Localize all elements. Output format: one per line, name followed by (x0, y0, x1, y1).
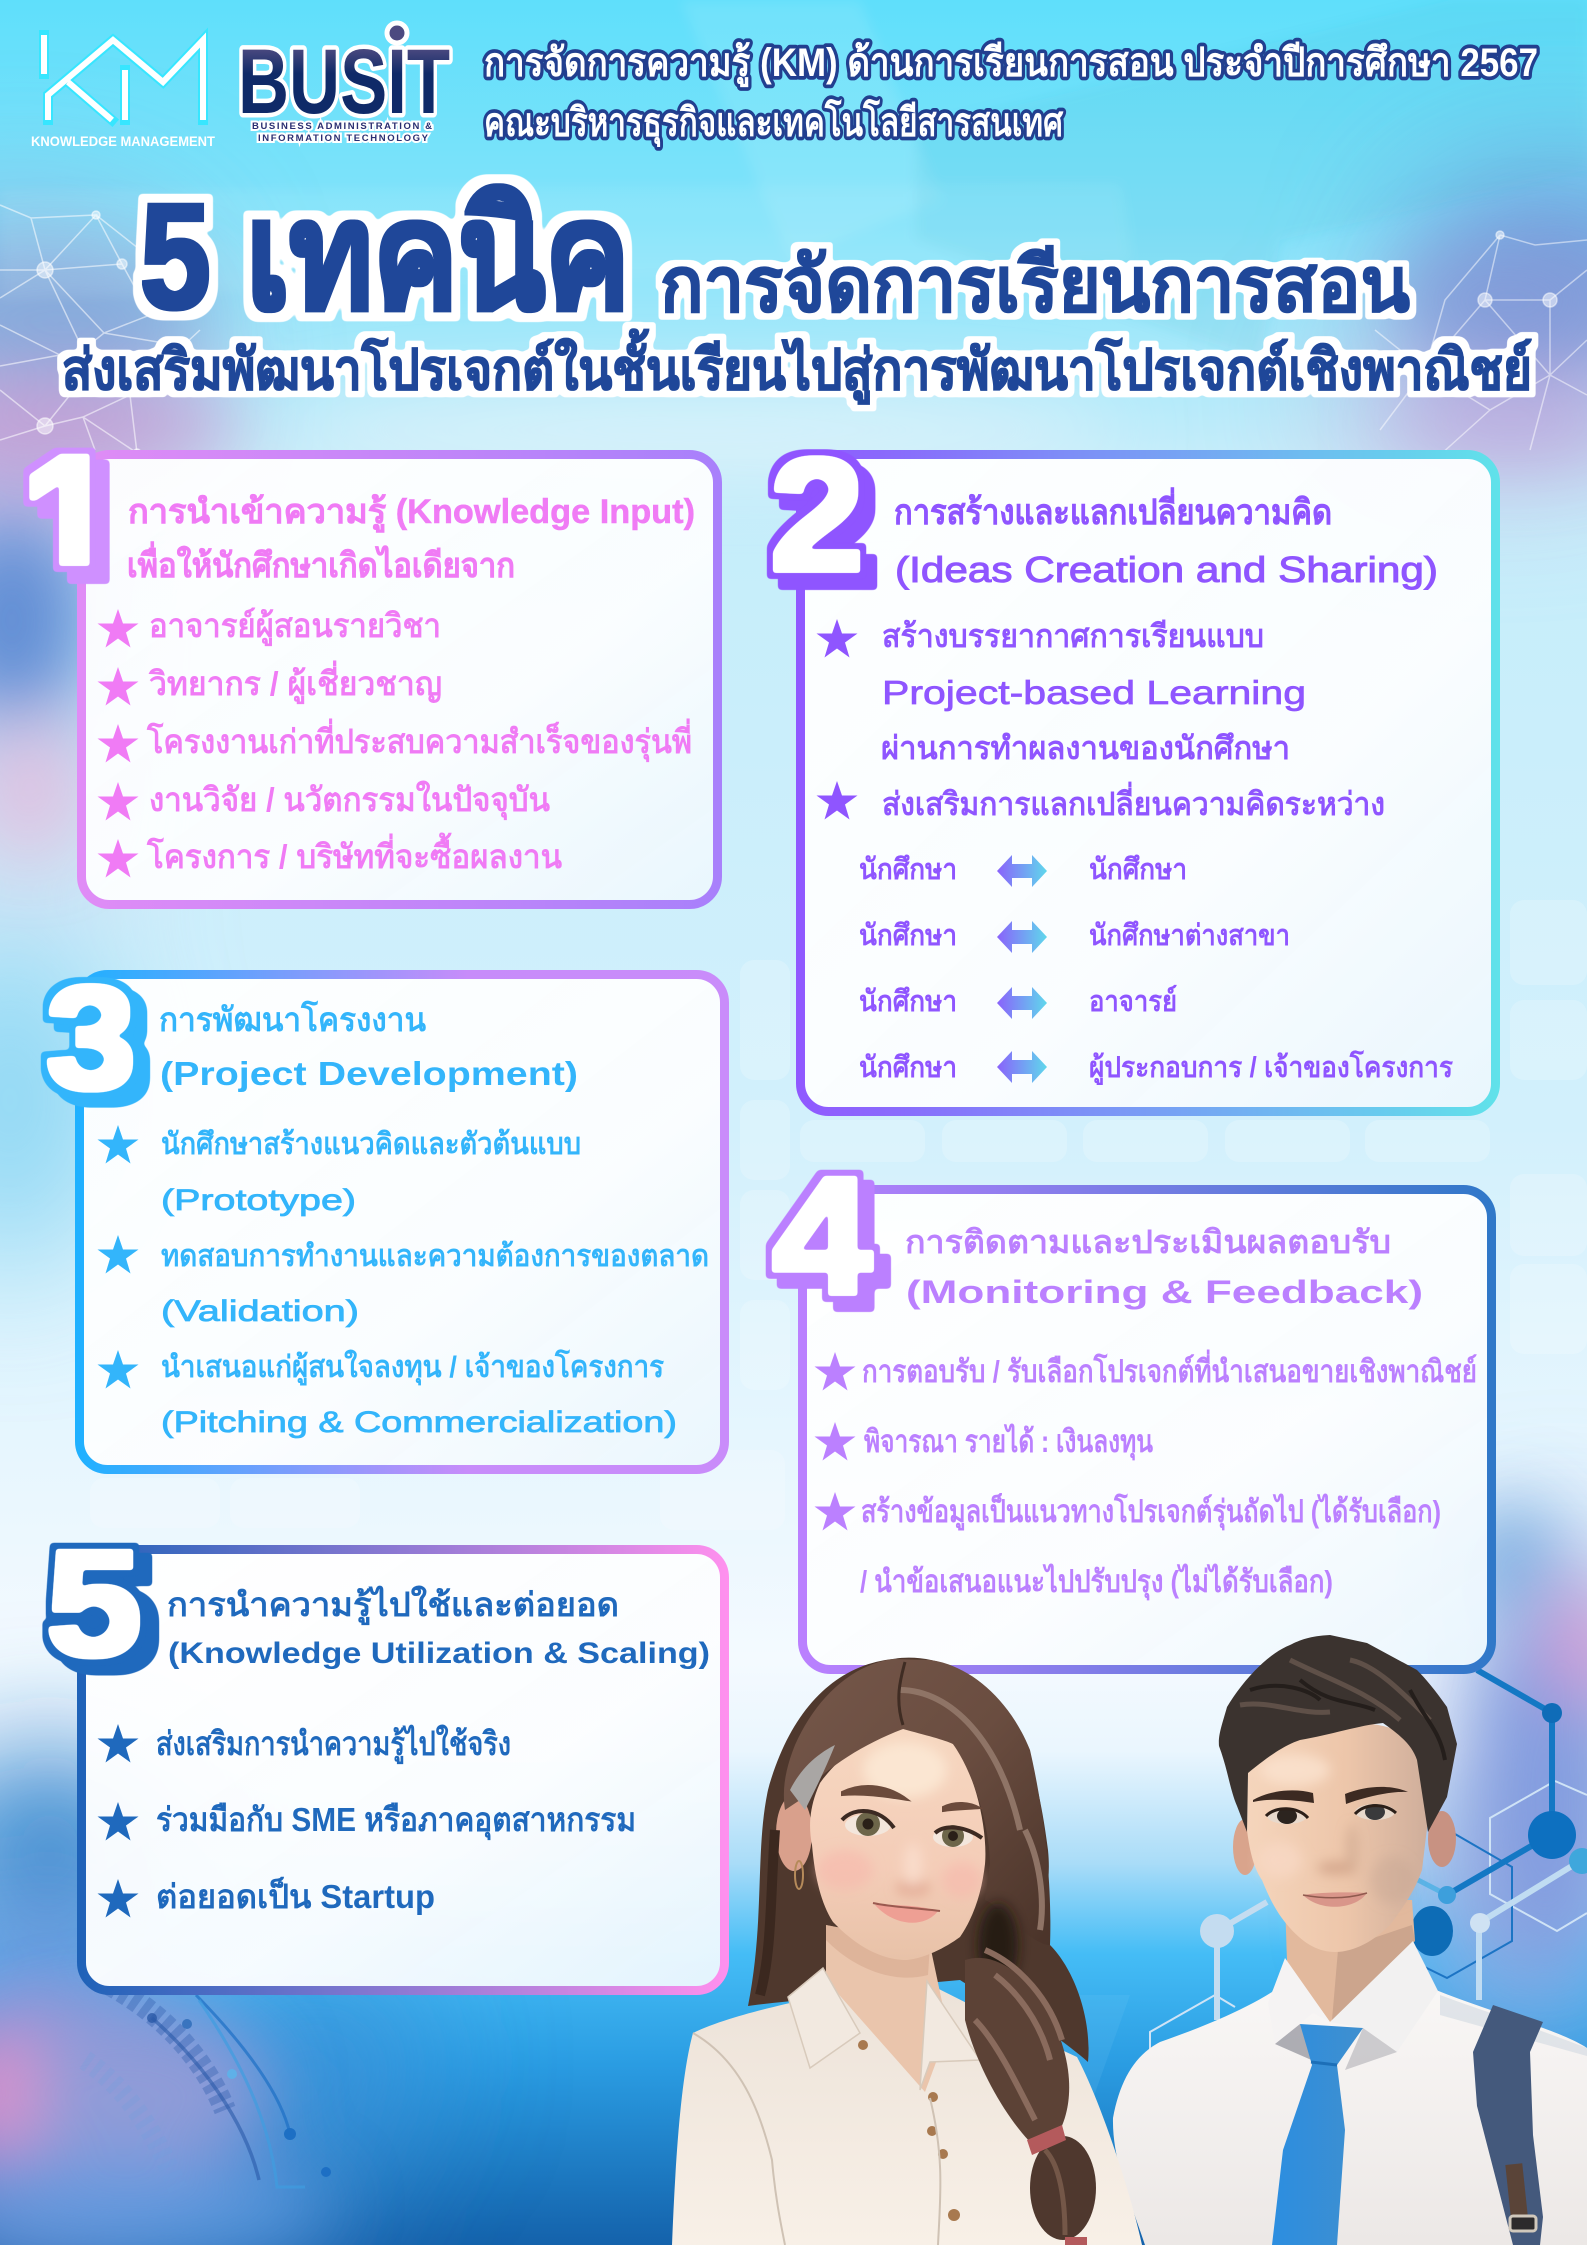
heading (167, 1585, 710, 1670)
shadow hair under cheek (978, 1903, 1018, 1987)
exchange rows: อาจารย์ (1089, 984, 1177, 1018)
logo: BUSIT: INFORMATION TECHNOLOGY (258, 133, 429, 144)
logo: BUSIT (238, 23, 450, 144)
heading (127, 493, 695, 585)
list: / นำข้อเสนอแนะไปปรับปรุง (ไม่ได้รับเลือก) (860, 1563, 1333, 1601)
long hair and braid (965, 1958, 1069, 2142)
list: อาจารย์ผู้สอนรายวิชา (149, 607, 441, 647)
brows (1253, 1787, 1408, 1804)
list: การตอบรับ / รับเลือกโปรเจกต์ที่นำเสนอขายเชิงพาณิชย์ (862, 1349, 1477, 1389)
eyes (845, 1814, 891, 1836)
title: การจัดการเรียนการสอน (660, 243, 1410, 328)
panel 1: knowledge input (20, 416, 718, 904)
ears (1233, 1819, 1257, 1875)
exchange rows: นักศึกษา (1089, 854, 1187, 886)
heading: การนำความรู้ไปใช้และต่อยอด (167, 1585, 619, 1626)
heading: การติดตามและประเมินผลตอบรับ (905, 1224, 1391, 1260)
shirt (1113, 1945, 1587, 2245)
logo: KM knowledge management: KNOWLEDGE MANAGEMENT (31, 134, 216, 149)
illustration: female student (672, 1658, 1142, 2245)
shirt (672, 1975, 1142, 2245)
header text: คณะบริหารธุรกิจและเทคโนโลยีสารสนเทศ (484, 99, 1063, 148)
logo: BUSIT: BUSINESS ADMINISTRATION & (252, 121, 432, 132)
list: Project-based Learning (882, 674, 1306, 711)
list: ส่งเสริมการแลกเปลี่ยนความคิดระหว่าง (882, 781, 1385, 822)
panel 5: knowledge utilization and scaling (46, 1519, 724, 1990)
mouth (1303, 1892, 1367, 1907)
heading: เพื่อให้นักศึกษาเกิดไอเดียจาก (127, 541, 515, 585)
list: ทดสอบการทำงานและความต้องการของตลาด (161, 1240, 709, 1273)
face (1247, 1723, 1428, 1952)
title: 5 เทคนิค (140, 172, 630, 340)
exchange rows: นักศึกษา (859, 1052, 957, 1084)
list: นำเสนอแก่ผู้สนใจลงทุน / เจ้าของโครงการ (161, 1348, 664, 1386)
exchange rows: นักศึกษา (859, 986, 957, 1018)
list: โครงงานเก่าที่ประสบความสำเร็จของรุ่นพี่ (146, 718, 692, 763)
list: นักศึกษาสร้างแนวคิดและตัวต้นแบบ (161, 1128, 581, 1161)
collar (788, 1968, 980, 2090)
exchange rows: นักศึกษา (859, 920, 957, 952)
number 1: 1 (20, 416, 120, 626)
heading: (Monitoring & Feedback) (906, 1274, 1423, 1310)
ear (776, 1795, 812, 1871)
heading: การพัฒนาโครงงาน (159, 1000, 426, 1038)
hair front (784, 1659, 1050, 1945)
panel 4: monitoring and feedback (772, 1144, 1492, 1670)
panel 2: ideas creation and sharing (770, 425, 1496, 1112)
mouth (875, 1905, 938, 1923)
background: molecule network right (1150, 1640, 1587, 2050)
list (814, 1349, 1477, 1601)
list: ส่งเสริมการนำความรู้ไปใช้จริง (156, 1724, 511, 1765)
backpack strap (1473, 2005, 1543, 2245)
list: ต่อยอดเป็น Startup (156, 1876, 435, 1915)
exchange rows: ผู้ประกอบการ / เจ้าของโครงการ (1089, 1049, 1453, 1085)
heading: (Ideas Creation and Sharing) (895, 549, 1438, 590)
list (98, 1125, 709, 1439)
heading (159, 1000, 578, 1092)
heading (905, 1224, 1423, 1310)
hair (1219, 1635, 1457, 1832)
number 2: 2 (770, 425, 864, 604)
neck (826, 1925, 948, 2092)
list: ร่วมมือกับ SME หรือภาคอุตสาหกรรม (156, 1801, 636, 1841)
heading: (Knowledge Utilization & Scaling) (168, 1637, 710, 1670)
heading: (Project Development) (160, 1055, 578, 1092)
exchange rows: นักศึกษาต่างสาขา (1089, 920, 1290, 952)
exchange rows: นักศึกษา (859, 854, 957, 886)
heading: การนำเข้าความรู้ (Knowledge Input) (128, 493, 695, 533)
list: ผ่านการทำผลงานของนักศึกษา (881, 730, 1290, 766)
list: (Validation) (161, 1295, 359, 1328)
list (816, 618, 1385, 822)
background: network mesh right (1375, 231, 1587, 455)
number 3: 3 (46, 956, 136, 1119)
list (98, 1724, 636, 1918)
panel 3: project development (46, 956, 724, 1470)
heading: การสร้างและแลกเปลี่ยนความคิด (894, 487, 1332, 532)
background: rounded key pattern (90, 900, 1587, 1530)
logo: BUSIT: BUSIT (238, 31, 450, 133)
list (98, 607, 692, 878)
list: พิจารณา รายได้ : เงินลงทุน (864, 1423, 1153, 1461)
neck (1285, 1900, 1415, 2022)
face (810, 1729, 985, 1960)
title (62, 172, 1532, 405)
number 5: 5 (46, 1519, 142, 1687)
tie (1272, 2024, 1363, 2245)
hair back (748, 1658, 1089, 2062)
list: (Prototype) (161, 1184, 356, 1217)
illustration: male student (1113, 1635, 1587, 2245)
list: วิทยากร / ผู้เชี่ยวชาญ (149, 660, 442, 705)
exchange rows (859, 854, 1453, 1085)
list: สร้างข้อมูลเป็นแนวทางโปรเจกต์รุ่นถัดไป (ได้รับเลือก) (861, 1492, 1441, 1531)
earring (795, 1861, 803, 1889)
heading (894, 487, 1438, 590)
collar (1330, 1941, 1438, 2052)
logo: KM knowledge management (31, 35, 216, 149)
list: สร้างบรรยากาศการเรียนแบบ (882, 618, 1264, 654)
list: โครงการ / บริษัทที่จะซื้อผลงาน (146, 832, 562, 875)
list: (Pitching & Commercialization) (161, 1406, 677, 1439)
eyes (1267, 1808, 1307, 1824)
brows (842, 1786, 980, 1811)
number 4: 4 (772, 1144, 872, 1329)
background: circuit arcs bottom left (85, 1985, 331, 2195)
shirt buttons (858, 2040, 960, 2221)
background: network mesh left (0, 205, 205, 457)
list: งานวิจัย / นวัตกรรมในปัจจุบัน (149, 780, 550, 821)
header text (484, 41, 1538, 148)
